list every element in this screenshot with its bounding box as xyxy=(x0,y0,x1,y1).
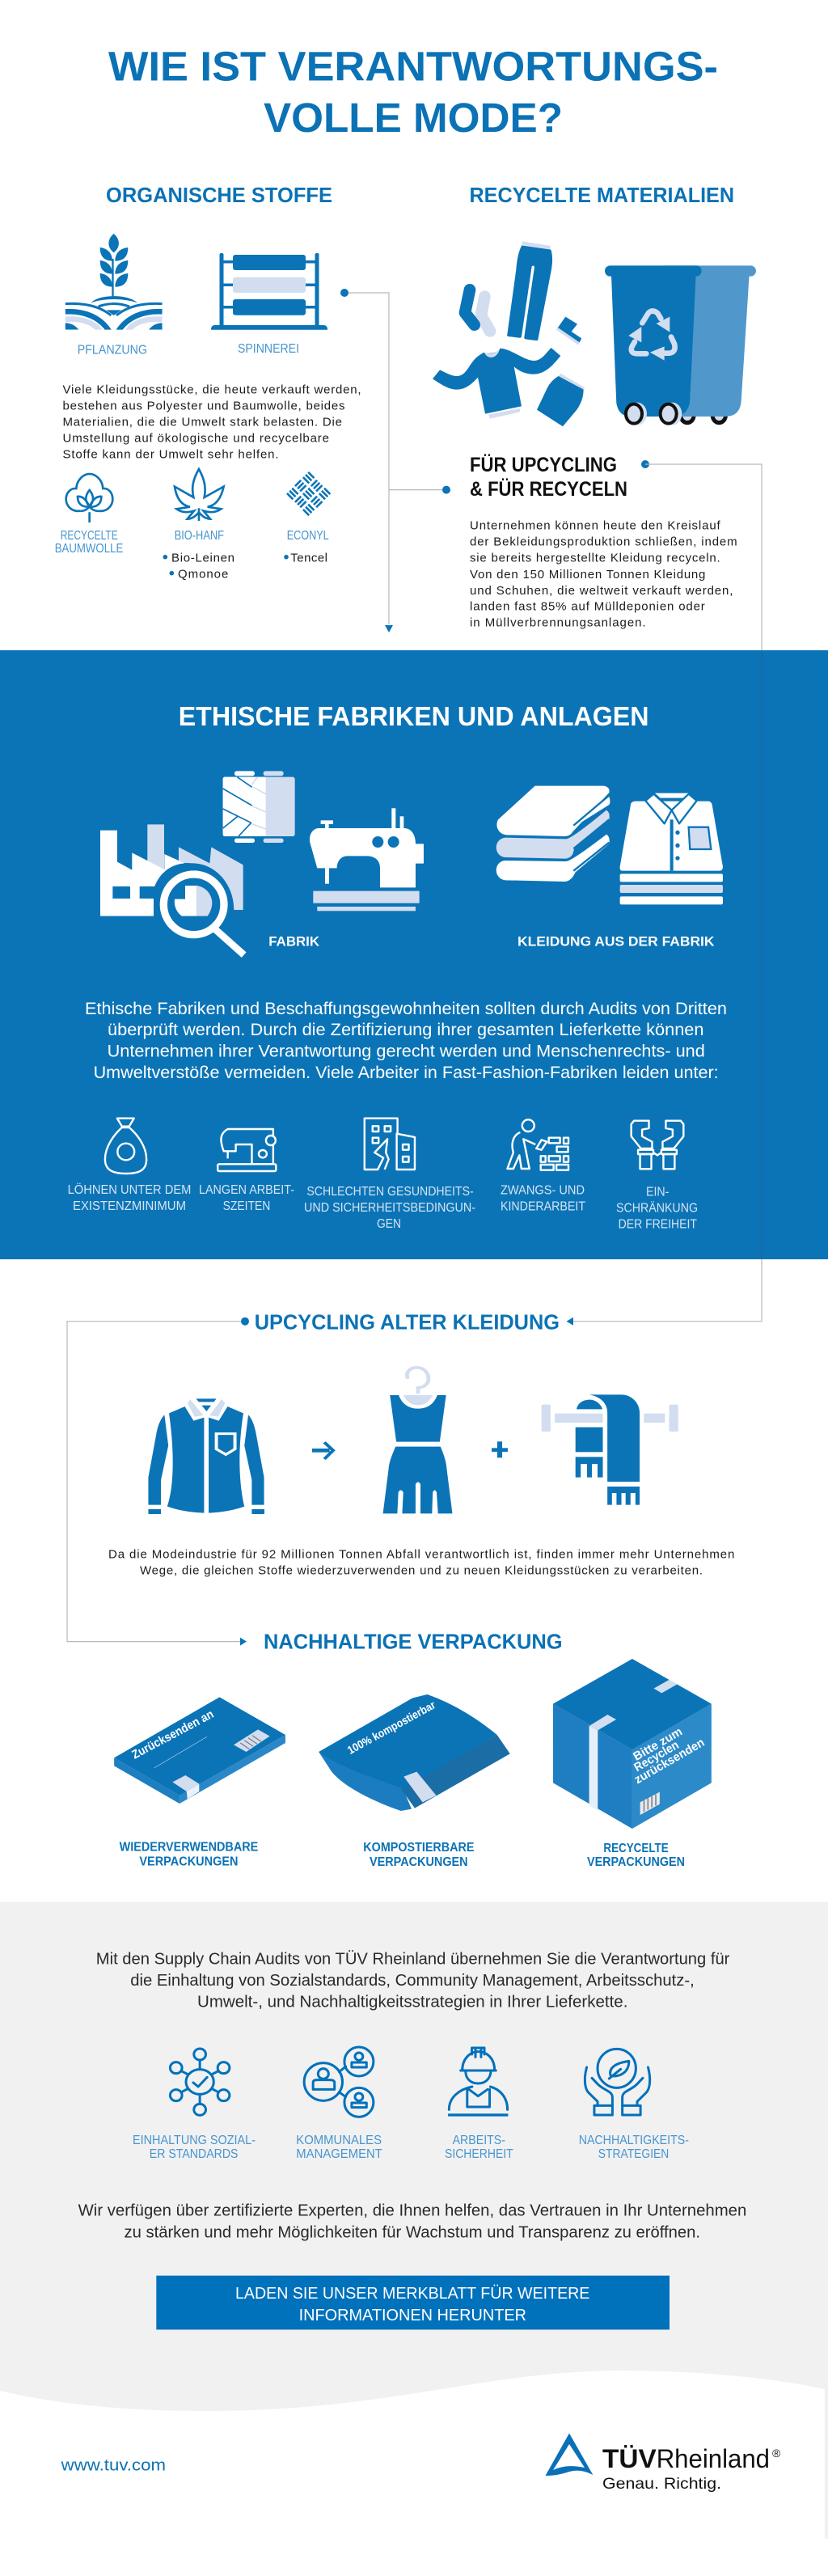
button: merkblatt xyxy=(156,2276,670,2329)
label: einschraenkung der freiheit xyxy=(616,1186,698,1232)
icon: recycled box: Recyclen xyxy=(632,1738,682,1774)
icon: recycled box xyxy=(553,1659,712,1829)
icon: community management xyxy=(304,2047,374,2117)
label: schlechten bedingungen: GEN xyxy=(377,1217,401,1231)
connector: upcycling to nachhaltige verpackung xyxy=(67,1318,249,1646)
label: schlechten bedingungen: SCHLECHTEN GESUNDHEITS- xyxy=(306,1185,474,1199)
label: econyl: ECONYL xyxy=(287,529,329,543)
icon: compostable bag xyxy=(319,1694,510,1811)
text: zertifizierte experten: zu stärken und mehr Möglichkeiten für Wachstum und Transparenz zu eröffnen. xyxy=(125,2223,700,2242)
label: wiederverwendbare verpackungen: VERPACKUNGEN xyxy=(139,1855,238,1869)
label: arbeitssicherheit xyxy=(445,2134,513,2161)
icon: folded clothes stack xyxy=(496,786,610,882)
icon: forced labour figure xyxy=(507,1119,568,1170)
icon: mailer package xyxy=(114,1697,285,1804)
icon: mailer package: Zurücksenden an xyxy=(129,1707,216,1762)
label: recycelte baumwolle xyxy=(55,529,123,556)
label: schlechten bedingungen xyxy=(304,1185,475,1231)
label: zwangsarbeit: KINDERARBEIT xyxy=(501,1200,585,1214)
icon: econyl weave xyxy=(286,472,331,516)
list: bio-leinen and qmonoe xyxy=(163,551,234,581)
heading: upcycling alter kleidung: UPCYCLING ALTER KLEIDUNG xyxy=(255,1309,560,1334)
text: organische stoffe: bestehen aus Polyester und Baumwolle, beides xyxy=(63,400,344,413)
text: organische stoffe: Materialien, die die Umwelt stark belasten. Die xyxy=(63,416,342,429)
connector: upcycling to upcycling alter kleidung xyxy=(566,460,762,1326)
label: kleidung aus der fabrik: KLEIDUNG AUS DER FABRIK xyxy=(518,933,715,949)
label: loehnen: EXISTENZMINIMUM xyxy=(73,1199,186,1213)
icon: money bag xyxy=(105,1119,146,1174)
text: upcycling: Wege, die gleichen Stoffe wiederzuverwenden und zu neuen Kleidungsstücken zu verarbeiten. xyxy=(140,1563,703,1577)
label: recycelte verpackungen: RECYCELTE xyxy=(603,1842,669,1855)
heading: nachhaltige verpackung: NACHHALTIGE VERPACKUNG xyxy=(264,1630,563,1654)
label: nachhaltigkeitsstrategien: NACHHALTIGKEITS- xyxy=(579,2134,689,2147)
label: loehnen: LÖHNEN UNTER DEM xyxy=(68,1182,191,1197)
icon: factory with magnifier xyxy=(100,824,244,955)
list: bio-leinen and qmonoe: Bio-Leinen xyxy=(171,551,234,565)
link: website: www.tuv.com xyxy=(61,2456,166,2474)
icon: recycling bin xyxy=(605,265,756,425)
label: kompostierbare verpackungen xyxy=(363,1841,474,1869)
subheading: fuer upcycling und recyceln xyxy=(470,453,627,501)
icon: discarded clothes xyxy=(433,241,585,426)
label: langen arbeitszeiten: LANGEN ARBEIT- xyxy=(199,1183,294,1197)
label: recycelte verpackungen: VERPACKUNGEN xyxy=(587,1855,685,1869)
text: organische stoffe xyxy=(63,383,361,462)
button: merkblatt: LADEN SIE UNSER MERKBLATT FÜR WEITERE xyxy=(235,2284,589,2303)
label: arbeitssicherheit: ARBEITS- xyxy=(453,2134,505,2147)
icon: hemp leaf xyxy=(175,469,224,521)
icon: plus xyxy=(492,1441,508,1457)
icon: sewing machine outline xyxy=(218,1129,276,1171)
icon: social standards network xyxy=(170,2049,230,2115)
text: zertifizierte experten xyxy=(78,2202,746,2242)
text: recycling: der Bekleidungsproduktion schließen, indem xyxy=(470,535,737,549)
subheading: fuer upcycling und recyceln: FÜR UPCYCLING xyxy=(470,453,617,476)
label: kommunales management: MANAGEMENT xyxy=(296,2147,382,2161)
label: einschraenkung der freiheit: EIN- xyxy=(646,1186,669,1199)
label: langen arbeitszeiten xyxy=(199,1183,294,1213)
connector: spinnerei to fuer upcycling xyxy=(340,289,450,632)
label: pflanzung: PFLANZUNG xyxy=(78,344,147,357)
label: langen arbeitszeiten: SZEITEN xyxy=(223,1199,270,1213)
label: einhaltung sozialer standards xyxy=(133,2134,256,2161)
button: merkblatt: INFORMATIONEN HERUNTER xyxy=(299,2306,526,2324)
logo: tuev rheinland xyxy=(545,2433,781,2493)
list: bio-leinen and qmonoe: Qmonoe xyxy=(178,567,228,581)
label: schlechten bedingungen: UND SICHERHEITSBEDINGUN- xyxy=(304,1201,475,1215)
logo: tuev rheinland: Rheinland xyxy=(657,2444,770,2473)
logo: tuev rheinland: Genau. Richtig. xyxy=(602,2475,721,2493)
label: kommunales management: KOMMUNALES xyxy=(296,2134,382,2147)
text: recycling: Unternehmen können heute den Kreislauf xyxy=(470,519,721,533)
label: spinnerei: SPINNEREI xyxy=(238,342,299,356)
text: ethische fabriken: Umweltverstöße vermeiden. Viele Arbeiter in Fast-Fashion-Fabriken leiden unter: xyxy=(94,1064,719,1082)
label: recycelte baumwolle: RECYCELTE xyxy=(61,529,118,543)
title xyxy=(108,44,718,141)
label: nachhaltigkeitsstrategien xyxy=(579,2134,689,2161)
label: einschraenkung der freiheit: DER FREIHEIT xyxy=(619,1218,697,1232)
label: einhaltung sozialer standards: ER STANDARDS xyxy=(150,2147,238,2161)
text: ethische fabriken: überprüft werden. Durch die Zertifizierung ihrer gesamten Lieferkette können xyxy=(108,1021,703,1039)
icon: pflanzung wheat and field xyxy=(65,234,163,332)
title: WIE IST VERANTWORTUNGS- xyxy=(108,44,718,89)
text: supply chain audits xyxy=(96,1949,730,2011)
panel: ethische fabriken xyxy=(0,650,828,1259)
icon: folded shirt xyxy=(620,793,723,904)
label: kommunales management xyxy=(296,2134,382,2161)
text: supply chain audits: die Einhaltung von Sozialstandards, Community Management, Arbeitsschutz-, xyxy=(130,1971,695,1990)
logo: tuev rheinland: ® xyxy=(772,2447,781,2460)
icon: recycled box: zurücksenden xyxy=(632,1736,707,1787)
label: zwangsarbeit xyxy=(501,1184,585,1214)
icon: scarf on rail xyxy=(542,1394,678,1505)
icon: recycled box: Bitte zum xyxy=(631,1725,685,1764)
title: VOLLE MODE? xyxy=(264,95,563,141)
text: recycling: und Schuhen, die weltweit verkauft werden, xyxy=(470,584,733,598)
label: fabrik: FABRIK xyxy=(268,933,320,949)
list: tencel: Tencel xyxy=(290,551,327,565)
heading: organische stoffe: ORGANISCHE STOFFE xyxy=(106,183,332,207)
text: supply chain audits: Umwelt-, und Nachhaltigkeitsstrategien in Ihrer Lieferkette. xyxy=(197,1992,627,2011)
label: arbeitssicherheit: SICHERHEIT xyxy=(445,2147,513,2161)
text: ethische fabriken: Unternehmen ihrer Verantwortung gerecht werden und Menschenrechts- und xyxy=(108,1043,705,1061)
label: loehnen xyxy=(68,1182,191,1213)
text: ethische fabriken xyxy=(85,1000,727,1082)
icon: shirt xyxy=(148,1398,264,1514)
icon: handcuffed hands xyxy=(632,1121,683,1169)
text: ethische fabriken: Ethische Fabriken und Beschaffungsgewohnheiten sollten durch Audits von Dritten xyxy=(85,1000,727,1018)
label: wiederverwendbare verpackungen xyxy=(120,1841,258,1869)
label: kompostierbare verpackungen: KOMPOSTIERBARE xyxy=(363,1841,474,1855)
icon: arrow xyxy=(312,1442,333,1459)
icon: sewing machine xyxy=(310,808,424,911)
panel: tuev rheinland audits xyxy=(0,1902,828,2539)
text: upcycling: Da die Modeindustrie für 92 Millionen Tonnen Abfall verantwortlich ist, finden immer mehr Unternehmen xyxy=(108,1548,734,1561)
label: bio-hanf: BIO-HANF xyxy=(175,529,224,543)
icon: spinnerei frame xyxy=(211,253,327,330)
text: recycling: landen fast 85% auf Mülldeponien oder xyxy=(470,600,705,614)
label: recycelte verpackungen xyxy=(587,1842,685,1869)
icon: thread spool xyxy=(223,771,295,843)
label: nachhaltigkeitsstrategien: STRATEGIEN xyxy=(598,2147,669,2161)
icon: cotton xyxy=(66,474,112,522)
label: recycelte baumwolle: BAUMWOLLE xyxy=(55,542,123,556)
icon: worker with hard hat xyxy=(448,2048,508,2117)
text: recycling xyxy=(470,519,737,629)
text: recycling: sie bereits hergestellte Kleidung recyceln. xyxy=(470,552,720,565)
label: wiederverwendbare verpackungen: WIEDERVERWENDBARE xyxy=(120,1841,258,1855)
heading: recycelte materialien: RECYCELTE MATERIALIEN xyxy=(469,183,734,207)
text: supply chain audits: Mit den Supply Chain Audits von TÜV Rheinland übernehmen Sie die Verantwortung für xyxy=(96,1949,730,1968)
icon: dress xyxy=(383,1368,452,1513)
label: zwangsarbeit: ZWANGS- UND xyxy=(501,1184,585,1198)
text: zertifizierte experten: Wir verfügen über zertifizierte Experten, die Ihnen helfen, das Vertrauen in Ihr Unternehmen xyxy=(78,2202,746,2220)
subheading: fuer upcycling und recyceln: & FÜR RECYCELN xyxy=(470,477,627,501)
label: einschraenkung der freiheit: SCHRÄNKUNG xyxy=(616,1201,698,1216)
text: organische stoffe: Umstellung auf ökologische und recycelbare xyxy=(63,432,329,446)
text: recycling: Von den 150 Millionen Tonnen Kleidung xyxy=(470,568,705,582)
text: organische stoffe: Viele Kleidungsstücke, die heute verkauft werden, xyxy=(63,383,361,397)
text: organische stoffe: Stoffe kann der Umwelt sehr helfen. xyxy=(63,448,278,462)
logo: tuev rheinland: TÜV xyxy=(602,2444,657,2473)
heading: ethische fabriken: ETHISCHE FABRIKEN UND ANLAGEN xyxy=(179,701,648,731)
label: kompostierbare verpackungen: VERPACKUNGEN xyxy=(370,1855,468,1869)
text: upcycling xyxy=(108,1548,734,1577)
icon: cracked building xyxy=(365,1119,415,1170)
icon: compostable bag: 100% kompostierbar xyxy=(345,1698,437,1757)
icon: hands holding leaf xyxy=(585,2049,650,2115)
label: einhaltung sozialer standards: EINHALTUNG SOZIAL- xyxy=(133,2134,256,2147)
text: recycling: in Müllverbrennungsanlagen. xyxy=(470,616,646,629)
